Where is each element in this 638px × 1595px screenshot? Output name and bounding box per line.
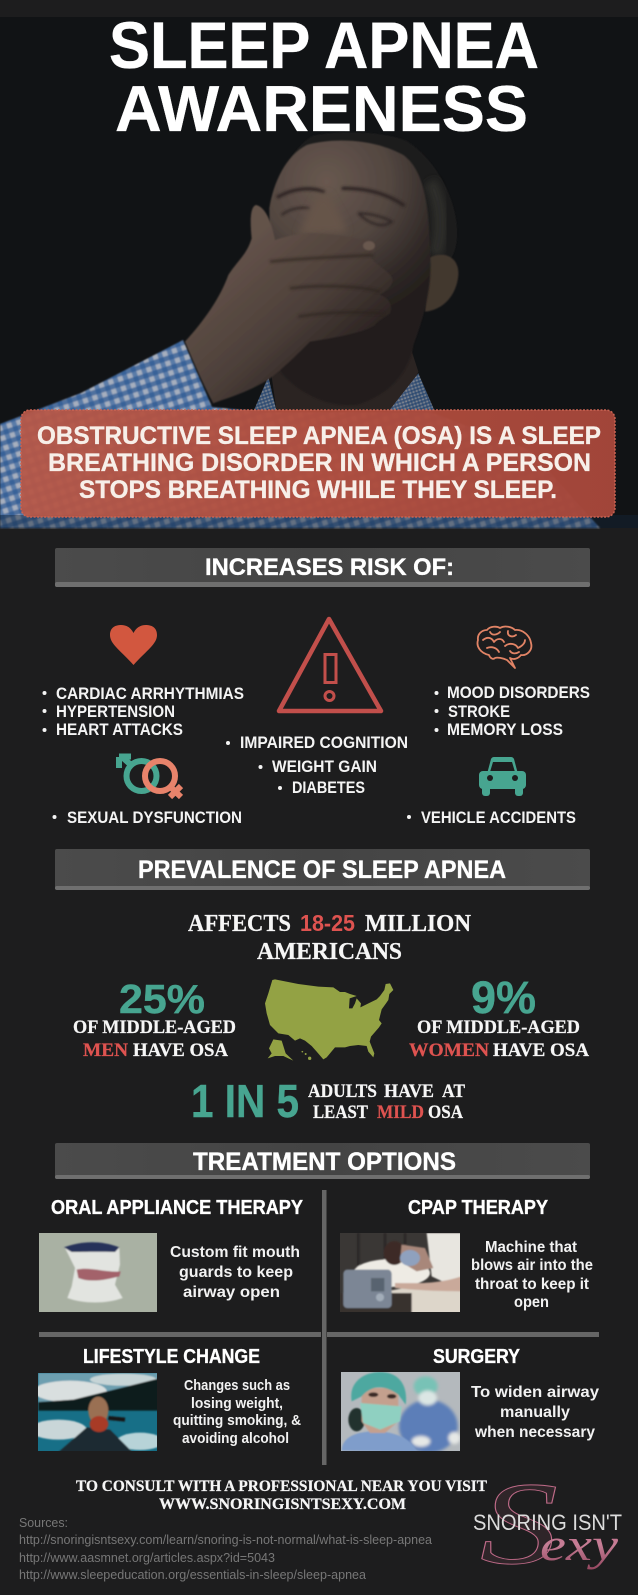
risk list: neurological (434, 684, 590, 739)
heading: increases risk of (55, 548, 590, 587)
stat: 1 in 5 adults: HAVE (384, 1081, 434, 1102)
treatment: surgery: SURGERY (433, 1346, 521, 1368)
stat: 1 in 5 adults: ADULTS (308, 1081, 377, 1102)
title: AWARENESS (115, 72, 528, 145)
title: SLEEP APNEA (109, 8, 539, 82)
treatment: lifestyle change: avoiding alcohol (182, 1430, 289, 1447)
photo: man sleeping with CPAP mask (340, 1233, 463, 1315)
risk list: neurological: MOOD DISORDERS (447, 684, 590, 702)
stat: 25 percent of men: 25% (119, 976, 205, 1022)
icon: car (479, 757, 526, 796)
treatment: CPAP therapy (340, 1197, 593, 1315)
risk list: neurological: STROKE (448, 703, 510, 721)
stat: affects millions: AFFECTS (188, 911, 291, 937)
risk list: central: IMPAIRED COGNITION (240, 734, 408, 752)
callout: definition of OSA: STOPS BREATHING WHILE THEY SLEEP. (79, 476, 557, 504)
sources: Sources: (19, 1515, 68, 1530)
eyebrows and eyes (278, 188, 403, 205)
stat: 25 percent of men: MEN (83, 1040, 128, 1061)
treatment: lifestyle change: quitting smoking, & (173, 1412, 301, 1429)
treatment grid dividers (39, 1190, 599, 1465)
shirt and sleeve (0, 340, 600, 528)
map of the United States (265, 979, 393, 1061)
risk list: neurological: MEMORY LOSS (447, 721, 563, 739)
callout: definition of OSA: OBSTRUCTIVE SLEEP APNEA (OSA) IS A SLEEP (37, 422, 601, 450)
photo: woman in a canoe on a lake (38, 1373, 157, 1451)
icon: gender symbols (119, 756, 181, 797)
sources (19, 1515, 433, 1582)
risk list: cardiac: CARDIAC ARRHYTHMIAS (56, 685, 244, 703)
neck (270, 325, 418, 412)
stat: affects millions (188, 910, 472, 965)
treatment: surgery: To widen airway (471, 1384, 599, 1401)
treatment: oral appliance therapy: guards to keep (179, 1264, 293, 1281)
hero photo: man covering a yawn (0, 17, 638, 528)
stat: 25 percent of men: HAVE OSA (133, 1040, 228, 1061)
risk list: central: WEIGHT GAIN (272, 758, 377, 776)
logo: Snoring Isn't Sexy: S (480, 1458, 558, 1589)
photo: mouth guard model (39, 1233, 157, 1312)
stat: 1 in 5 adults (191, 1075, 465, 1127)
bottom shade (0, 515, 638, 528)
stat: affects millions: 18-25 (300, 910, 355, 936)
call to action: WWW.SNORINGISNTSEXY.COM (159, 1496, 406, 1513)
heading: treatment options (55, 1143, 590, 1179)
icon: heart (110, 625, 157, 665)
callout: definition of OSA (21, 410, 615, 517)
photo: surgeons in masks (341, 1372, 460, 1453)
treatment: surgery: manually (500, 1404, 570, 1421)
logo: Snoring Isn't Sexy: exy (540, 1519, 619, 1570)
stat: 9 percent of women: WOMEN (409, 1040, 489, 1061)
treatment: surgery: when necessary (474, 1424, 595, 1441)
head and hand (185, 132, 458, 412)
stat: 1 in 5 adults: AT (442, 1081, 465, 1102)
treatment: lifestyle change: LIFESTYLE CHANGE (83, 1346, 260, 1368)
stat: 25 percent of men: OF MIDDLE-AGED (73, 1017, 236, 1038)
logo: Snoring Isn't Sexy (473, 1458, 622, 1589)
stat: 9 percent of women: OF MIDDLE-AGED (417, 1017, 580, 1038)
icon: warning triangle (279, 619, 381, 711)
sources: http://snoringisntsexy.com/learn/snoring-is-not-normal/what-is-sleep-apnea (19, 1532, 433, 1547)
ear (425, 255, 458, 312)
treatment: surgery (341, 1346, 599, 1453)
stat: 1 in 5 adults: MILD (377, 1102, 424, 1123)
risk item: vehicle accidents: VEHICLE ACCIDENTS (421, 809, 576, 827)
risk list: cardiac: HYPERTENSION (56, 703, 175, 721)
risk list: cardiac: HEART ATTACKS (56, 721, 183, 739)
callout: definition of OSA: BREATHING DISORDER IN WHICH A PERSON (48, 449, 591, 477)
treatment: oral appliance therapy: Custom fit mouth (170, 1244, 300, 1261)
stat: affects millions: AMERICANS (257, 939, 402, 965)
treatment: oral appliance therapy: airway open (183, 1284, 280, 1301)
hair (270, 132, 457, 265)
treatment: oral appliance therapy (39, 1197, 304, 1312)
risk item: sexual dysfunction: SEXUAL DYSFUNCTION (67, 809, 242, 827)
treatment: oral appliance therapy: ORAL APPLIANCE THERAPY (51, 1197, 304, 1219)
treatment: lifestyle change: Changes such as (184, 1377, 290, 1394)
face (269, 141, 431, 405)
nose (298, 193, 347, 235)
treatment: lifestyle change: losing weight, (191, 1395, 283, 1412)
risk list: central: DIABETES (292, 779, 365, 797)
heading: prevalence (55, 849, 590, 890)
logo: Snoring Isn't Sexy: SNORING ISN'T (473, 1510, 622, 1535)
treatment: CPAP therapy: Machine that (485, 1239, 577, 1256)
finger creases (270, 255, 383, 317)
treatment: lifestyle change (30, 1346, 301, 1453)
treatment: CPAP therapy: blows air into the (471, 1257, 593, 1274)
stat: 9 percent of women: 9% (471, 972, 536, 1023)
shirt collars (253, 373, 435, 412)
risk list: cardiac (42, 685, 244, 739)
treatment: CPAP therapy: open (514, 1294, 549, 1311)
icon: brain (477, 627, 531, 668)
heading: increases risk of: INCREASES RISK OF: (205, 554, 454, 581)
treatment: CPAP therapy: throat to keep it (475, 1276, 589, 1293)
title (109, 8, 539, 145)
treatment: CPAP therapy: CPAP THERAPY (408, 1197, 549, 1219)
stat: 9 percent of women (409, 972, 589, 1061)
heading: prevalence: PREVALENCE OF SLEEP APNEA (138, 856, 506, 884)
call to action: TO CONSULT WITH A PROFESSIONAL NEAR YOU VISIT (76, 1478, 487, 1495)
sources: http://www.aasmnet.org/articles.aspx?id=5043 (19, 1550, 275, 1565)
stat: 1 in 5 adults: 1 IN 5 (191, 1075, 299, 1127)
call to action (76, 1478, 487, 1513)
heading: treatment options: TREATMENT OPTIONS (193, 1148, 456, 1176)
stat: 9 percent of women: HAVE OSA (493, 1040, 589, 1061)
stat: affects millions: MILLION (365, 911, 472, 937)
hand (185, 205, 393, 403)
stat: 25 percent of men (73, 976, 236, 1061)
stat: 1 in 5 adults: OSA (428, 1102, 463, 1123)
risk list: central (226, 734, 408, 797)
sources: http://www.sleepeducation.org/essentials-in-sleep/sleep-apnea (19, 1567, 367, 1582)
stat: 1 in 5 adults: LEAST (313, 1102, 368, 1123)
